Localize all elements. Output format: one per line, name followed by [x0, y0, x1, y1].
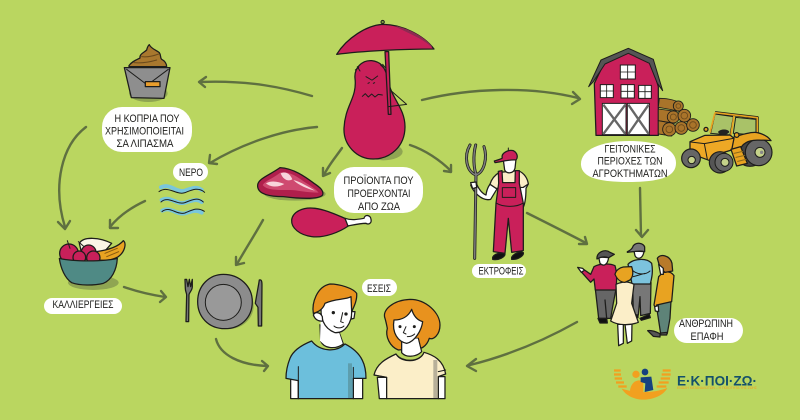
- label: farmers bubble: [472, 264, 526, 278]
- icon: water waves: [159, 186, 205, 214]
- icon: red barn: [589, 48, 663, 135]
- arrow: bacterium to animal products: [323, 148, 342, 176]
- illustration: young man in blue t-shirt: [286, 284, 366, 399]
- arrow: bacterium to manure bucket: [199, 77, 312, 96]
- arrow: plate to you: [216, 339, 268, 371]
- arrow: manure to crops: [58, 127, 86, 229]
- icon: group of people talking: [578, 243, 674, 346]
- arrow: water to crops: [110, 201, 145, 228]
- label: crops bubble: [44, 298, 122, 314]
- label: manure bubble: [102, 107, 192, 152]
- label: human contact bubble: [674, 318, 743, 343]
- icon: farmer with pitchfork: [467, 145, 528, 260]
- label: animal products bubble: ΠΡΟΪΟΝΤΑ ΠΟΥ: [344, 175, 414, 187]
- icon: umbrella and angry bacterium: [337, 20, 434, 160]
- label: manure bubble: Η ΚΟΠΡΙΑ ΠΟΥ: [114, 113, 180, 125]
- label: water bubble: [173, 163, 208, 181]
- icon: steak: [258, 168, 326, 201]
- icon: hay bales: [658, 98, 699, 136]
- icon: plate with fork and knife: [185, 274, 262, 329]
- arrow: bacterium to water: [209, 127, 317, 164]
- label: animal products bubble: [334, 167, 423, 213]
- label: farm neighbourhoods bubble: [581, 141, 676, 182]
- arrow: animal products to plate: [236, 220, 263, 265]
- arrow: bacterium to farm: [422, 90, 580, 104]
- arrow: farm to human contact: [636, 188, 648, 237]
- label: crops bubble: ΚΑΛΛΙΕΡΓΕΙΕΣ: [52, 299, 114, 311]
- illustration: young woman in cream t-shirt: [374, 299, 446, 399]
- label: you bubble: [362, 279, 397, 296]
- label: farm neighbourhoods bubble: ΓΕΙΤΟΝΙΚΕΣ: [604, 144, 656, 156]
- logo: EKPIZO: ΕΝΩΣΗ ΚΑΤΑΝΑΛΩΤΩΝ – Η ΠΟΙΟΤΗΤΑ ΤΗΣ ΖΩΗΣ: [677, 386, 758, 390]
- icon: fruit bowl: [59, 238, 125, 290]
- icon: chicken leg: [292, 208, 371, 237]
- arrow: crops to plate: [124, 287, 166, 302]
- label: you bubble: ΕΣΕΙΣ: [367, 283, 391, 295]
- arrow: human contact to you: [467, 322, 577, 371]
- label: farm neighbourhoods bubble: ΑΓΡΟΚΤΗΜΑΤΩΝ: [592, 168, 668, 180]
- label: human contact bubble: ΑΝΘΡΩΠΙΝΗ: [679, 318, 733, 330]
- label: animal products bubble: ΑΠΟ ΖΩΑ: [358, 201, 401, 213]
- label: manure bubble: ΧΡΗΣΙΜΟΠΟΙΕΙΤΑΙ: [105, 126, 184, 138]
- logo: EKPIZO: Ε·Κ·ΠΟΙ·ΖΩ·: [677, 372, 757, 388]
- logo: EKPIZO: [614, 369, 758, 400]
- label: animal products bubble: ΠΡΟΕΡΧΟΝΤΑΙ: [348, 188, 410, 200]
- arrow: farmers to human contact: [527, 213, 587, 244]
- label: water bubble: ΝΕΡΟ: [179, 167, 203, 179]
- label: manure bubble: ΣΑ ΛΙΠΑΣΜΑ: [116, 138, 174, 150]
- icon: orange tractor: [682, 113, 772, 173]
- label: farmers bubble: ΕΚΤΡΟΦΕΙΣ: [478, 266, 524, 278]
- label: farm neighbourhoods bubble: ΠΕΡΙΟΧΕΣ ΤΩΝ: [598, 156, 663, 168]
- label: human contact bubble: ΕΠΑΦΗ: [690, 331, 724, 343]
- icon: manure bucket: [124, 45, 170, 102]
- arrow: bacterium to farmers: [410, 145, 451, 172]
